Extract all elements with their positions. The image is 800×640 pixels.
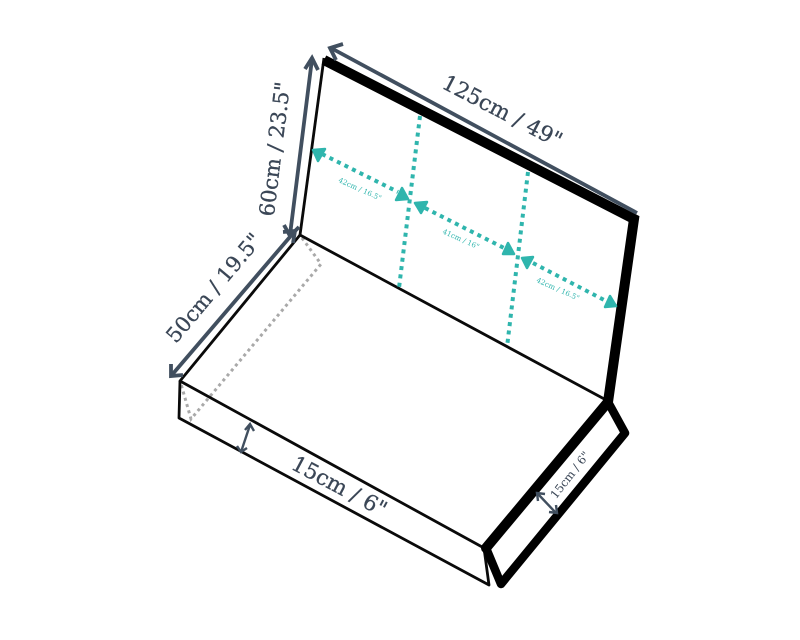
label 41cm: 41cm / 16": [441, 227, 481, 251]
label 60cm: 60cm / 23.5": [255, 80, 295, 218]
teal width arrow 2: [415, 202, 514, 254]
label 42cm: 42cm / 16.5": [337, 175, 383, 203]
label 42cm right: 42cm / 16.5": [535, 275, 581, 303]
dimension arrow: 60cm: [284, 58, 318, 236]
dimension arrow: front 15cm: [237, 424, 254, 452]
label front 15cm: 15cm / 6": [287, 451, 391, 523]
label 50cm: 50cm / 19.5": [161, 228, 267, 348]
dimension arrow: 125cm: [330, 44, 637, 213]
dimension arrow: 50cm: [171, 231, 295, 376]
teal section dividers: [399, 116, 528, 347]
teal width arrow 3: [522, 257, 616, 307]
dimension arrow: side 15cm: [537, 493, 557, 513]
thick right side edge: [486, 402, 625, 584]
teal width arrow 1: [313, 149, 408, 203]
thick back panel edge: [324, 60, 634, 402]
label side 15cm: 15cm / 6": [547, 449, 593, 501]
seat and front outline: [179, 58, 608, 585]
hidden cushion fold outline: [181, 238, 321, 419]
label 125cm: 125cm / 49": [438, 71, 566, 153]
